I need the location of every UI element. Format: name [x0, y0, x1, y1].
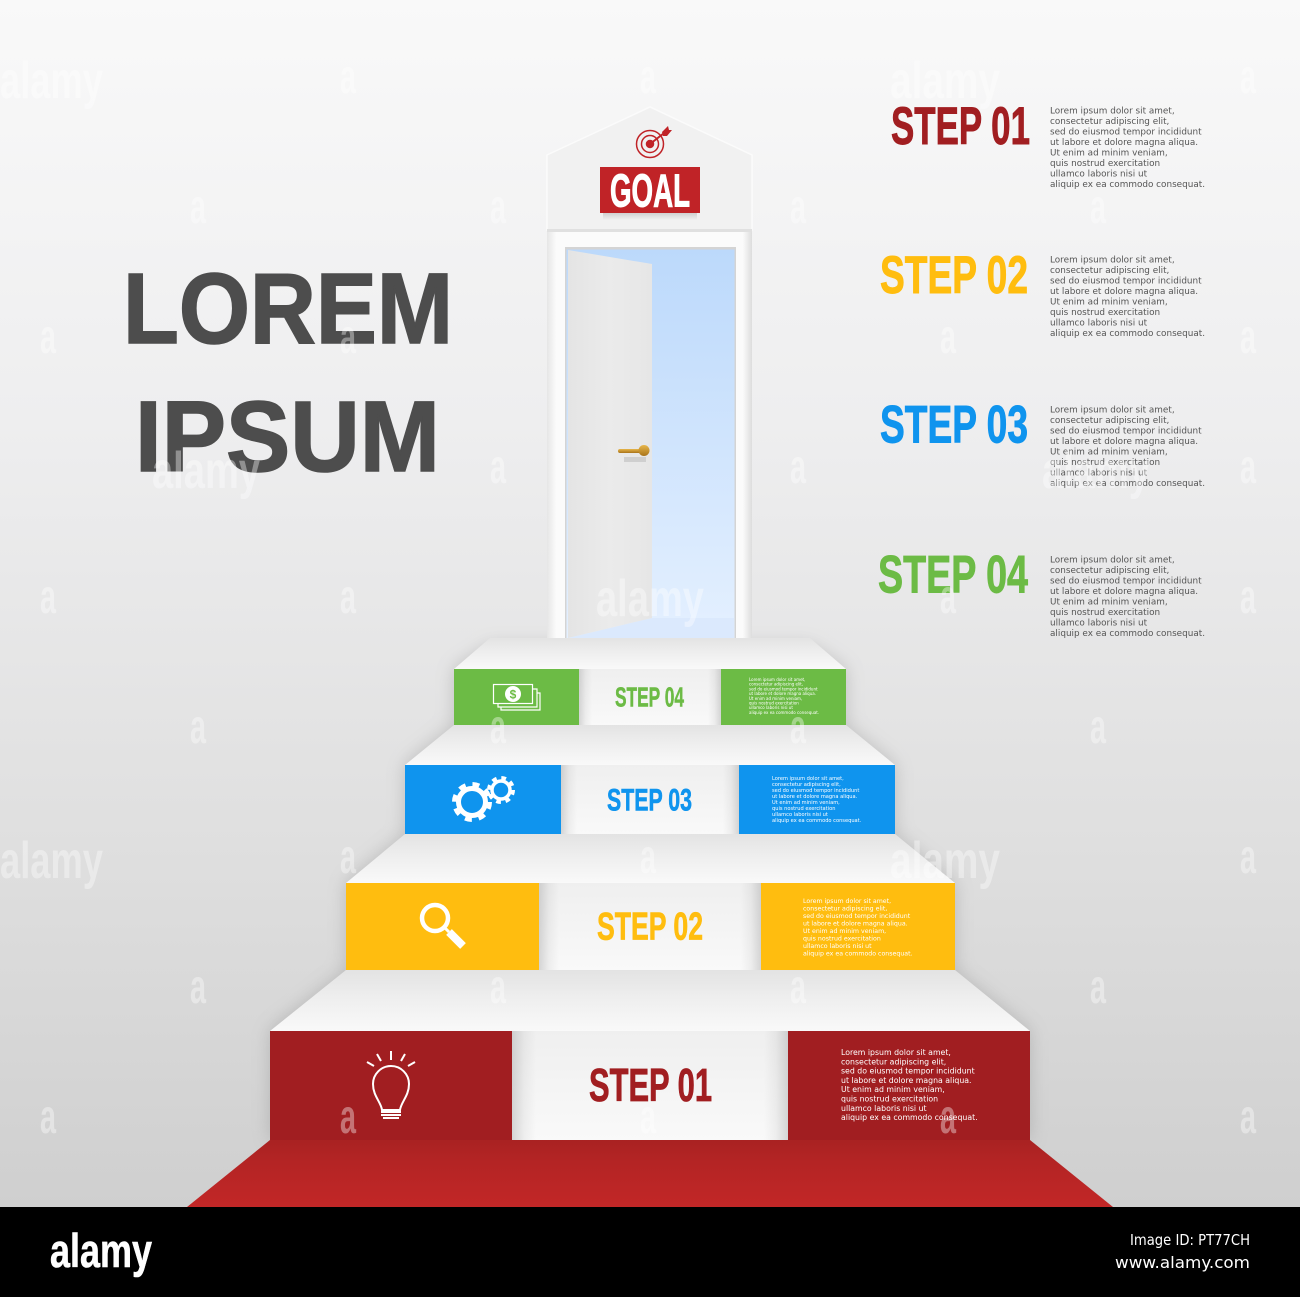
- watermark overlay: a: [490, 181, 506, 234]
- panel text 2: sed do eiusmod tempor incididunt: [803, 913, 911, 920]
- watermark overlay: a: [1240, 831, 1256, 884]
- floor beyond door: [568, 618, 734, 638]
- watermark overlay: a: [190, 181, 206, 234]
- watermark overlay: a: [790, 441, 806, 494]
- watermark overlay: a: [40, 571, 56, 624]
- right legend: step 01: ullamco laboris nisi ut: [1050, 170, 1148, 180]
- panel text 1: Ut enim ad minim veniam,: [841, 1085, 945, 1094]
- step 01 label: STEP 01: [589, 1059, 712, 1111]
- icon: gears: [454, 778, 513, 820]
- right legend: step 03: STEP 03: [880, 396, 1028, 454]
- stair: step 01: [270, 970, 1030, 1140]
- watermark overlay: alamy: [0, 52, 103, 110]
- panel text 2: consectetur adipiscing elit,: [803, 906, 887, 912]
- title: [123, 253, 453, 493]
- riser centre 4: [579, 669, 721, 725]
- watermark overlay: a: [1240, 571, 1256, 624]
- right legend: step 01: STEP 01: [891, 97, 1030, 156]
- right legend: step 02: aliquip ex ea commodo consequat.: [1050, 329, 1205, 339]
- panel text 3: ullamco laboris nisi ut: [772, 812, 828, 818]
- panel text 3: Lorem ipsum dolor sit amet,: [772, 776, 844, 782]
- right legend: step 04: ut labore et dolore magna aliqua.: [1050, 587, 1198, 597]
- footer url: www.alamy.com: [1115, 1253, 1250, 1272]
- right legend: step 03: Ut enim ad minim veniam,: [1050, 448, 1168, 458]
- right legend: step 04: [878, 546, 1205, 639]
- right legend: step 01: sed do eiusmod tempor incididunt: [1050, 128, 1202, 138]
- red carpet: [187, 1140, 1113, 1207]
- right legend: step 03: sed do eiusmod tempor incididunt: [1050, 426, 1202, 436]
- watermark overlay: a: [1240, 441, 1256, 494]
- right legend: step 01: quis nostrud exercitation: [1050, 159, 1160, 169]
- watermark overlay: a: [1090, 701, 1106, 754]
- watermark overlay: a: [40, 311, 56, 364]
- right panel 3: [739, 765, 895, 834]
- goal label: GOAL: [610, 164, 690, 216]
- watermark overlay: a: [940, 311, 956, 364]
- watermark overlay: a: [1090, 961, 1106, 1014]
- watermark overlay: a: [790, 181, 806, 234]
- open door leaf: [568, 250, 652, 638]
- right legend: step 04: Lorem ipsum dolor sit amet,: [1050, 556, 1175, 566]
- right legend: step 04: ullamco laboris nisi ut: [1050, 618, 1148, 628]
- right legend: step 03: ullamco laboris nisi ut: [1050, 468, 1148, 478]
- panel text 2: aliquip ex ea commodo consequat.: [803, 950, 913, 958]
- watermark overlay: a: [1240, 311, 1256, 364]
- watermark overlay: a: [790, 701, 806, 754]
- watermark overlay: alamy: [1042, 442, 1150, 500]
- panel text 4: Lorem ipsum dolor sit amet,: [749, 677, 805, 682]
- left panel 1: [270, 1031, 512, 1140]
- stair: step 02: [346, 834, 955, 970]
- watermark overlay: a: [1240, 51, 1256, 104]
- watermark overlay: a: [940, 1091, 956, 1144]
- panel text 2: Ut enim ad minim veniam,: [803, 928, 886, 935]
- left panel 2: [346, 883, 539, 970]
- stair shadow on wall: [270, 645, 1030, 1140]
- right legend: step 02: ut labore et dolore magna aliqua.: [1050, 287, 1198, 297]
- panel text 4: ullamco laboris nisi ut: [749, 705, 793, 710]
- right legend: step 04: aliquip ex ea commodo consequat.: [1050, 629, 1205, 639]
- panel text 4: ut labore et dolore magna aliqua.: [749, 691, 816, 696]
- right legend: step 01: consectetur adipiscing elit,: [1050, 117, 1169, 127]
- right legend: step 04: consectetur adipiscing elit,: [1050, 566, 1169, 576]
- footer bar: [0, 1207, 1300, 1297]
- panel text 4: aliquip ex ea commodo consequat.: [749, 710, 819, 715]
- right panel 4: [721, 669, 846, 725]
- right legend: step 04: sed do eiusmod tempor incididunt: [1050, 576, 1202, 586]
- left panel 3: [405, 765, 561, 834]
- watermark overlay: a: [340, 831, 356, 884]
- right legend: step 04: Ut enim ad minim veniam,: [1050, 598, 1168, 608]
- riser centre 3: [561, 765, 739, 834]
- right legend: step 02: Ut enim ad minim veniam,: [1050, 298, 1168, 308]
- right legend: step 02: quis nostrud exercitation: [1050, 308, 1160, 318]
- panel text 2: ullamco laboris nisi ut: [803, 943, 872, 950]
- watermark overlay: alamy: [0, 832, 103, 890]
- panel text 1: ullamco laboris nisi ut: [841, 1104, 927, 1113]
- watermark overlay: a: [790, 961, 806, 1014]
- panel text 3: consectetur adipiscing elit,: [772, 782, 841, 788]
- watermark overlay: a: [1090, 181, 1106, 234]
- stair: step 04: [454, 638, 846, 725]
- title: LOREM: [123, 253, 453, 365]
- door handle: [618, 445, 650, 462]
- stair: step 03: [405, 725, 895, 834]
- panel text 2: ut labore et dolore magna aliqua.: [803, 920, 908, 928]
- tread 1: [270, 970, 1030, 1031]
- right legend: step 01: ut labore et dolore magna aliqua.: [1050, 138, 1198, 148]
- right panel 1: [788, 1031, 1030, 1140]
- step 02 label: STEP 02: [597, 906, 703, 948]
- riser centre 1: [512, 1031, 788, 1140]
- panel text 2: Lorem ipsum dolor sit amet,: [803, 898, 891, 905]
- right legend: step 01: Ut enim ad minim veniam,: [1050, 148, 1168, 158]
- tread 2: [346, 834, 955, 883]
- watermark overlay: a: [490, 961, 506, 1014]
- right legend: step 02: [880, 246, 1205, 339]
- panel text 1: sed do eiusmod tempor incididunt: [841, 1067, 975, 1076]
- watermark overlay: a: [190, 701, 206, 754]
- sky opening: [566, 250, 734, 638]
- watermark overlay: a: [190, 961, 206, 1014]
- tread 4: [454, 638, 846, 669]
- panel text 3: Ut enim ad minim veniam,: [772, 800, 840, 806]
- panel text 1: aliquip ex ea commodo consequat.: [841, 1113, 978, 1122]
- door pediment: [547, 107, 752, 230]
- panel text 4: Ut enim ad minim veniam,: [749, 696, 802, 701]
- title: IPSUM: [135, 381, 440, 493]
- door frame: [547, 230, 752, 638]
- panel text 3: sed do eiusmod tempor incididunt: [772, 788, 859, 794]
- panel text 4: quis nostrud exercitation: [749, 700, 799, 706]
- right legend: step 02: ullamco laboris nisi ut: [1050, 318, 1148, 328]
- footer logo: alamy: [50, 1224, 152, 1277]
- panel text 1: ut labore et dolore magna aliqua.: [841, 1076, 972, 1085]
- icon: banknotes: $: [510, 688, 517, 702]
- right legend: step 03: consectetur adipiscing elit,: [1050, 416, 1169, 426]
- right panel 2: [761, 883, 955, 970]
- riser centre 2: [539, 883, 761, 970]
- watermark overlay: alamy: [152, 442, 260, 500]
- target icon: [636, 126, 672, 158]
- goal label: [600, 164, 700, 216]
- watermark overlay: a: [40, 1091, 56, 1144]
- panel text 1: quis nostrud exercitation: [841, 1094, 938, 1104]
- right legend: step 03: Lorem ipsum dolor sit amet,: [1050, 406, 1175, 416]
- right legend: step 04: STEP 04: [878, 546, 1028, 604]
- tread 3: [405, 725, 895, 765]
- right legend: step 01: aliquip ex ea commodo consequat.: [1050, 180, 1205, 190]
- right legend: step 02: consectetur adipiscing elit,: [1050, 266, 1169, 276]
- watermark overlay: a: [490, 441, 506, 494]
- icon: banknotes: [494, 684, 540, 710]
- right legend: step 01: Lorem ipsum dolor sit amet,: [1050, 106, 1175, 116]
- right legend: step 03: ut labore et dolore magna aliqua.: [1050, 437, 1198, 447]
- watermark overlay: a: [640, 51, 656, 104]
- watermark overlay: a: [340, 1091, 356, 1144]
- icon: light bulb: [367, 1051, 415, 1118]
- footer image id: Image ID: PT77CH: [1130, 1231, 1250, 1249]
- panel text 2: quis nostrud exercitation: [803, 936, 881, 942]
- watermark overlay: a: [340, 311, 356, 364]
- panel text 3: quis nostrud exercitation: [772, 806, 835, 812]
- watermark overlay: a: [640, 831, 656, 884]
- goal label shadow: [603, 213, 697, 220]
- watermark overlay: alamy: [890, 832, 1000, 890]
- panel text 4: sed do eiusmod tempor incididunt: [749, 686, 818, 691]
- right legend: step 02: STEP 02: [880, 246, 1028, 305]
- step 03 label: STEP 03: [607, 782, 692, 818]
- watermark overlay: alamy: [596, 570, 704, 628]
- right legend: step 01: [891, 97, 1205, 190]
- right legend: step 02: Lorem ipsum dolor sit amet,: [1050, 256, 1175, 266]
- watermark overlay: a: [640, 1091, 656, 1144]
- icon: magnifier: [422, 905, 463, 946]
- panel text 1: consectetur adipiscing elit,: [841, 1057, 946, 1066]
- watermark overlay: a: [940, 571, 956, 624]
- panel text 4: consectetur adipiscing elit,: [749, 682, 803, 687]
- watermark overlay: alamy: [890, 52, 1000, 110]
- right legend: step 02: sed do eiusmod tempor incididunt: [1050, 276, 1202, 286]
- watermark overlay: a: [340, 51, 356, 104]
- watermark overlay: a: [1240, 1091, 1256, 1144]
- right legend: step 04: quis nostrud exercitation: [1050, 608, 1160, 618]
- right legend: step 03: aliquip ex ea commodo consequat.: [1050, 479, 1205, 489]
- right legend: step 03: [880, 396, 1205, 489]
- watermark overlay: a: [340, 571, 356, 624]
- watermark overlay: a: [490, 701, 506, 754]
- right legend: step 03: quis nostrud exercitation: [1050, 458, 1160, 468]
- step 04 label: STEP 04: [615, 682, 684, 712]
- panel text 3: aliquip ex ea commodo consequat.: [772, 818, 862, 824]
- left panel 4: [454, 669, 579, 725]
- panel text 3: ut labore et dolore magna aliqua.: [772, 794, 858, 800]
- door assembly: [547, 107, 752, 638]
- panel text 1: Lorem ipsum dolor sit amet,: [841, 1048, 951, 1057]
